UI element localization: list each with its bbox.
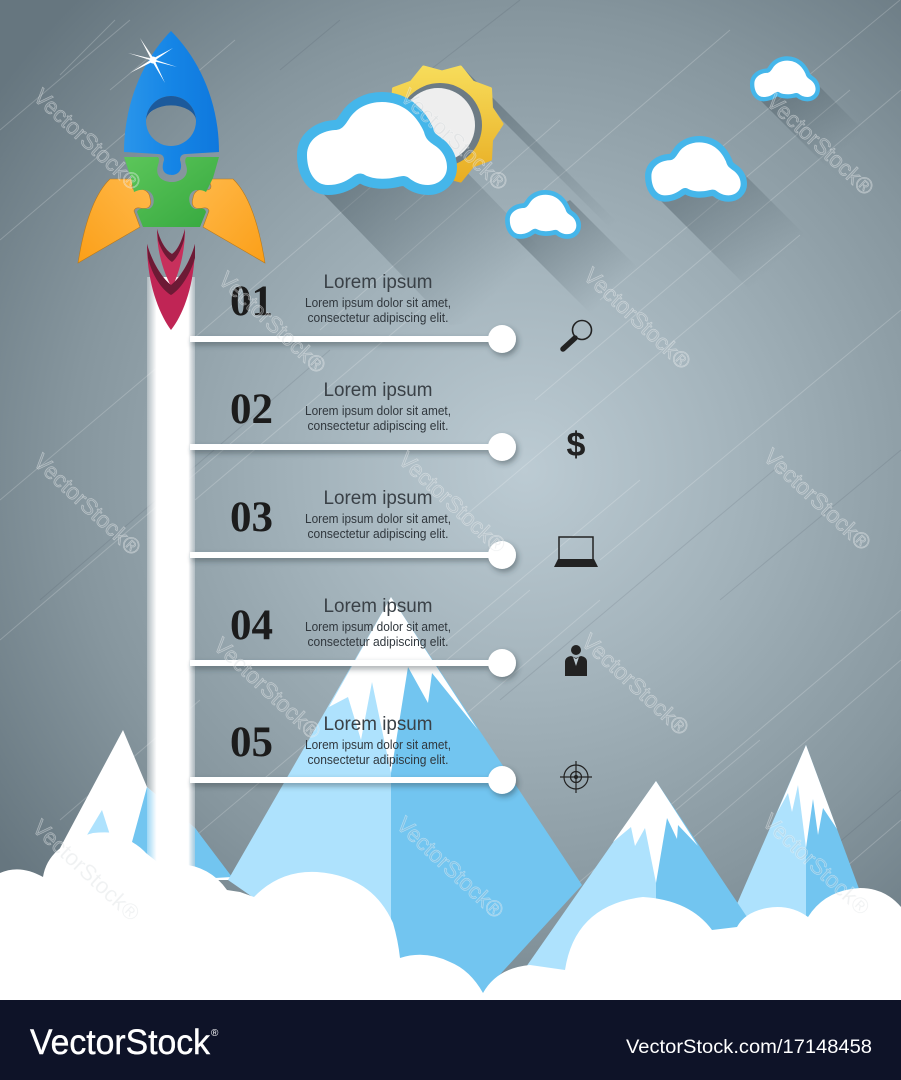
left fin <box>78 179 151 263</box>
right fin <box>192 179 265 263</box>
step 3 <box>190 488 516 569</box>
body text: consectetur adipiscing elit. <box>308 752 448 767</box>
heading: Lorem ipsum <box>324 488 432 509</box>
bar and node <box>190 649 516 677</box>
body text <box>305 619 451 649</box>
watermarks: VectorStock® <box>396 84 513 196</box>
icon: sun <box>382 67 502 181</box>
number: 01 <box>230 278 273 325</box>
sparkle <box>128 38 177 83</box>
step 5 <box>190 714 516 794</box>
number: 02 <box>230 386 273 433</box>
watermarks: VectorStock® <box>762 89 879 201</box>
watermarks: VectorStock® <box>29 84 146 196</box>
watermarks: VectorStock® <box>28 815 145 927</box>
footer url: VectorStock.com/17148458 <box>626 1037 872 1058</box>
nose hole shading <box>146 96 196 121</box>
step 2 <box>190 380 516 461</box>
body text <box>305 511 451 541</box>
body text: consectetur adipiscing elit. <box>308 526 448 541</box>
watermarks: VectorStock® <box>759 444 876 556</box>
body text: Lorem ipsum dolor sit amet, <box>305 511 451 526</box>
body text <box>305 295 451 325</box>
heading: Lorem ipsum <box>324 380 432 401</box>
watermarks: VectorStock® <box>579 263 696 375</box>
long shadows <box>305 70 890 343</box>
watermarks: VectorStock® <box>577 629 694 741</box>
icon: person <box>565 645 587 676</box>
body text: consectetur adipiscing elit. <box>308 418 448 433</box>
inner flame dark band <box>157 229 185 262</box>
watermarks: VectorStock® <box>394 447 511 559</box>
number: 04 <box>230 602 273 649</box>
watermarks: VectorStock® <box>29 449 146 561</box>
bar and node <box>190 766 516 794</box>
watermarks <box>28 84 879 927</box>
body text: Lorem ipsum dolor sit amet, <box>305 295 451 310</box>
watermarks: VectorStock® <box>392 812 509 924</box>
watermarks: VectorStock® <box>209 633 326 745</box>
step 1 <box>190 272 516 353</box>
rocket body puzzle piece <box>124 157 219 227</box>
body text: consectetur adipiscing elit. <box>308 634 448 649</box>
heading: Lorem ipsum <box>324 714 432 735</box>
cloud: large <box>307 102 447 185</box>
bar and node <box>190 325 516 353</box>
registered mark: ® <box>211 1028 219 1039</box>
cloud: medium right <box>651 142 741 195</box>
icon: target <box>560 761 592 793</box>
body text: Lorem ipsum dolor sit amet, <box>305 737 451 752</box>
body text <box>305 737 451 767</box>
mountain: left <box>43 730 232 880</box>
body text: Lorem ipsum dolor sit amet, <box>305 403 451 418</box>
mountain: main peak <box>228 597 582 993</box>
mountain: right <box>505 781 765 997</box>
cloud: small center <box>510 195 576 234</box>
footer bar <box>0 1000 901 1080</box>
footer logo: VectorStock <box>30 1023 210 1062</box>
body text: Lorem ipsum dolor sit amet, <box>305 619 451 634</box>
watermarks: VectorStock® <box>214 267 331 379</box>
icon: dollar: $ <box>567 426 586 464</box>
bar and node <box>190 433 516 461</box>
heading: Lorem ipsum <box>324 596 432 617</box>
body text <box>305 403 451 433</box>
step 4 <box>190 596 516 677</box>
number: 03 <box>230 494 273 541</box>
mountain: far right <box>730 745 865 945</box>
rocket <box>78 31 265 330</box>
bar and node <box>190 541 516 569</box>
number: 05 <box>230 719 273 766</box>
flame dark band <box>147 244 195 295</box>
inner flame <box>157 229 185 288</box>
heading: Lorem ipsum <box>324 272 432 293</box>
body text: consectetur adipiscing elit. <box>308 310 448 325</box>
ground clouds <box>0 832 901 1000</box>
rocket trail <box>147 277 195 877</box>
watermarks: VectorStock® <box>758 809 875 921</box>
icon: magnifier <box>563 320 592 349</box>
cloud: small top right <box>754 61 816 97</box>
outer flame <box>147 244 195 330</box>
rocket nose <box>124 31 219 175</box>
icon: laptop <box>554 537 598 567</box>
